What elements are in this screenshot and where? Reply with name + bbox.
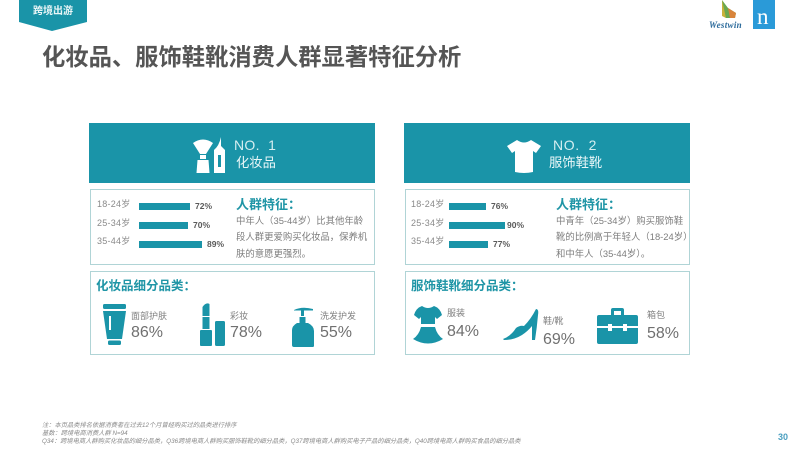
age bars: 77% [493,239,510,249]
item: hair care: 55% [320,324,352,341]
heading: subcategories: 化妆品细分品类： [96,279,196,293]
item: facial care: 86% [131,324,163,341]
item: shoes [503,309,575,348]
text: audience note: 中年人（35-44岁）比其他年龄 [236,215,363,226]
item: makeup: 彩妆 [230,311,248,321]
age bars: 89% [207,239,224,249]
item: makeup: 78% [230,324,262,341]
heading: 人群特征: 人群特征： [236,197,301,212]
text: 服饰鞋靴: 服饰鞋靴 [549,155,602,170]
page number: 30 [778,432,788,442]
text: audience note: 和中年人（35-44岁）。 [556,248,650,259]
logo: n: n [757,4,768,29]
age bars: 35-44岁 [97,236,131,246]
item: luggage and bags [597,308,679,344]
logo: n [753,0,775,29]
item: facial care: 面部护肤 [131,311,167,321]
text: audience note [236,215,368,259]
tag: category ribbon: 跨境出游 [33,6,73,17]
title: 化妆品、服饰鞋靴消费人群显著特征分析 [42,44,461,70]
age bars: 18-24岁 [97,199,131,209]
age bars: 72% [195,201,212,211]
footnote: 基数：跨境电商消费人群 N=94 [42,430,128,437]
item: makeup [200,303,262,346]
footnote: 注：本页品类排名依据消费者在过去12个月曾经购买过的品类进行排序 [42,422,236,429]
item: clothing [413,306,479,344]
age bars [411,199,524,249]
text: audience note: 靴的比例高于年轻人（18-24岁） [556,231,692,242]
tag: category ribbon [19,0,87,31]
age bars: 90% [507,220,524,230]
item: clothing: 84% [447,323,479,340]
item: shoes: 69% [543,331,575,348]
panel: NO.2 header [404,123,690,183]
age bars: 25-34岁 [97,218,131,228]
panel: NO.1 audience [90,189,375,265]
icon: brush and lipstick [193,137,225,173]
text: audience note: 段人群更爱购买化妆品，保养机 [236,231,367,242]
panel: NO.1 header [89,123,375,183]
age bars: 35-44岁 [411,236,445,246]
text: 化妆品: 化妆品 [236,155,276,170]
item: shoes: 鞋/靴 [543,316,564,326]
age bars: 18-24岁 [411,199,445,209]
icon: t-shirt [507,140,541,173]
text: audience note [556,215,692,259]
text: NO. 2: NO. 2 [553,137,597,153]
text: NO. 1: NO. 1 [234,137,276,153]
age bars: 76% [491,201,508,211]
panel: NO.2 subcategories [405,271,690,355]
item: hair care [292,308,356,347]
age bars: 70% [193,220,210,230]
heading: subcategories: 服饰鞋靴细分品类： [411,279,524,293]
logo: Westwin: Westwin [709,20,742,30]
item: luggage and bags: 58% [647,325,679,342]
text: audience note: 中青年（25-34岁）购买服饰鞋 [556,215,683,226]
item: luggage and bags: 箱包 [647,310,665,320]
age bars [97,199,224,249]
item: hair care: 洗发护发 [320,311,356,321]
item: facial care [103,304,167,345]
text: audience note: 肤的意愿更强烈。 [236,248,311,259]
age bars: 25-34岁 [411,218,445,228]
logo: Westwin [709,0,742,30]
footnote [42,422,521,445]
footnote: Q34：跨境电商人群购买化妆品的细分品类，Q36跨境电商人群购买服饰鞋靴的细分品类，Q37跨境电商人群购买电子产品的细分品类，Q40跨境电商人群购买食品的细分品类 [42,438,520,445]
panel: NO.2 audience [405,189,690,265]
heading: 人群特征: 人群特征： [556,197,621,212]
panel: NO.1 subcategories [90,271,375,355]
item: clothing: 服装 [447,308,465,318]
